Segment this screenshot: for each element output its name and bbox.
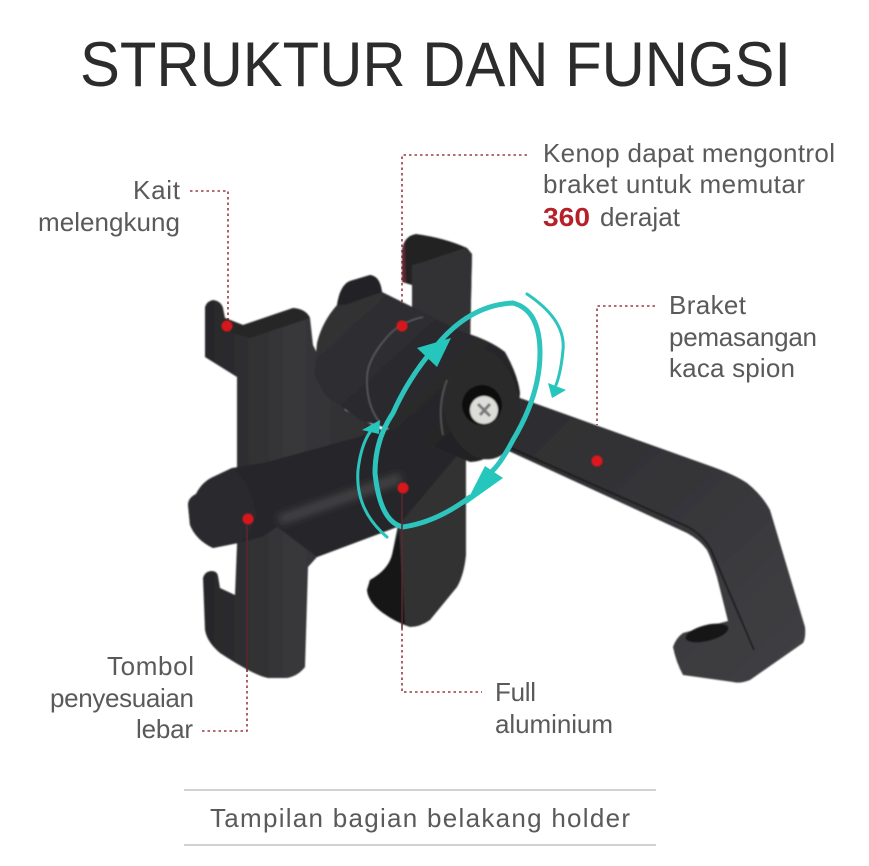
- red markers: [222, 320, 602, 524]
- callout: knob rotates 360 degrees: [402, 138, 835, 322]
- footer caption: Tampilan bagian belakang holder: [210, 803, 630, 833]
- callout: curved hook: [38, 175, 228, 322]
- callout: curved hook: Kait: [133, 175, 181, 205]
- big loop arrow: [375, 303, 540, 527]
- mirror bracket arm: [498, 395, 805, 683]
- screw: [462, 385, 502, 425]
- teal rotation arrows: [358, 294, 566, 537]
- right plate top clip: [402, 234, 472, 345]
- callout: width adjustment button: lebar: [136, 714, 193, 744]
- callout: knob rotates 360 degrees: braket untuk memutar: [543, 169, 805, 199]
- title: STRUKTUR DAN FUNGSI: [80, 30, 791, 100]
- callout: full aluminium: Full: [495, 677, 536, 707]
- right plate lower part: [367, 440, 466, 627]
- left plate: [203, 300, 400, 678]
- thin outer arrows: [527, 294, 563, 385]
- callout: full aluminium: aluminium: [495, 709, 613, 739]
- callout: mirror mount bracket: pemasangan: [669, 322, 817, 352]
- arm hole: [684, 620, 730, 646]
- callout: width adjustment button: Tombol: [107, 651, 194, 681]
- callout: full aluminium: [402, 628, 613, 739]
- callout: mirror mount bracket: kaca spion: [669, 353, 795, 383]
- cylinder end cap: [188, 468, 256, 548]
- holder illustration: [188, 234, 805, 683]
- callout: mirror mount bracket: [597, 290, 817, 425]
- callout: knob rotates 360 degrees: derajat: [600, 202, 681, 232]
- callout: width adjustment button: penyesuaian: [50, 683, 194, 713]
- rotary knob: [314, 275, 520, 462]
- horizontal width adjuster cylinder: [188, 415, 466, 557]
- callout: knob rotates 360 degrees: 360: [543, 202, 590, 232]
- callout: knob rotates 360 degrees: Kenop dapat mengontrol: [543, 138, 835, 168]
- cylinder highlight band: [280, 478, 400, 520]
- arm edge highlight: [500, 443, 754, 650]
- callout: mirror mount bracket: Braket: [669, 290, 747, 320]
- callout: width adjustment button: [50, 651, 247, 744]
- marker leader lines over product: [247, 494, 402, 672]
- knob seam line: [367, 317, 423, 423]
- knob front face: [432, 339, 530, 467]
- callout: curved hook: melengkung: [38, 207, 180, 237]
